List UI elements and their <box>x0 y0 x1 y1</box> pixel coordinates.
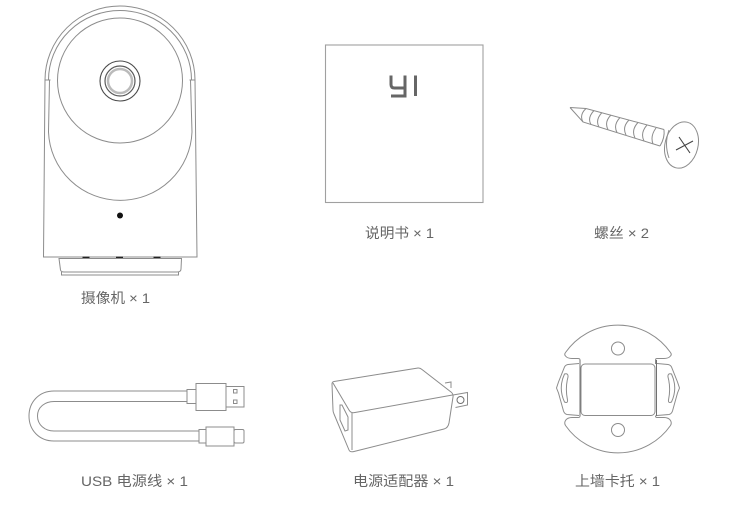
icon: USB cable <box>29 384 244 446</box>
icon: camera <box>44 6 197 275</box>
left tab <box>556 364 579 416</box>
right tab <box>657 364 680 416</box>
panel: manual <box>326 45 483 202</box>
USB-C plug <box>199 427 244 446</box>
USB-A plug <box>187 384 244 410</box>
bottom hole <box>612 424 624 436</box>
label: USB cable: USB 电源线 × 1 <box>81 473 188 489</box>
label: screws: 螺丝 × 2 <box>594 225 649 241</box>
icon: indicator dot <box>117 212 123 218</box>
icon: YI logo <box>391 76 416 96</box>
label: power adapter: 电源适配器 × 1 <box>353 473 454 489</box>
label: manual: 说明书 × 1 <box>365 225 434 241</box>
icon: camera lens <box>100 61 140 101</box>
icon: wall mount <box>556 325 680 453</box>
label: camera: 摄像机 × 1 <box>81 290 150 306</box>
icon: screw <box>570 108 703 172</box>
top hole <box>612 342 624 355</box>
label: wall mount: 上墙卡托 × 1 <box>575 473 660 489</box>
icon: power adapter <box>332 368 468 452</box>
